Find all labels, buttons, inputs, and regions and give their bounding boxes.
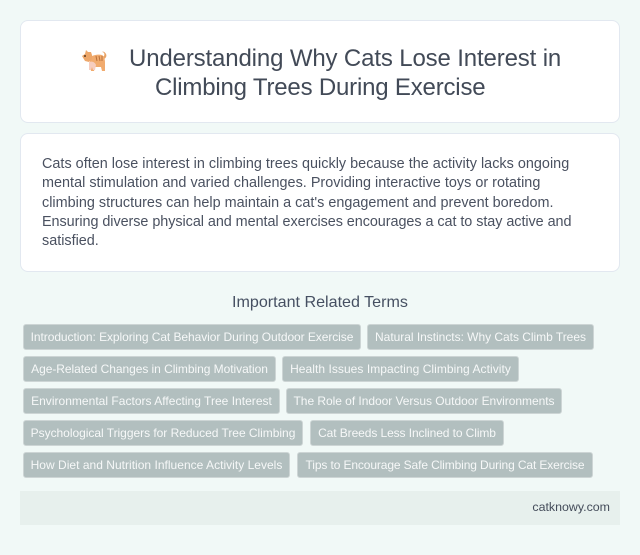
tag: Health Issues Impacting Climbing Activity <box>290 362 511 376</box>
title: Understanding Why Cats Lose Interest in <box>129 45 561 72</box>
tag <box>23 324 361 350</box>
title <box>129 45 561 101</box>
tag: Environmental Factors Affecting Tree Interest <box>31 394 272 408</box>
body paragraph: Ensuring diverse physical and mental exercises encourages a cat to stay active and <box>42 214 571 230</box>
tag <box>367 324 594 350</box>
tag: Natural Instincts: Why Cats Climb Trees <box>375 330 586 344</box>
header panel <box>20 20 620 123</box>
tag: Introduction: Exploring Cat Behavior During Outdoor Exercise <box>31 330 353 344</box>
tag <box>310 420 504 446</box>
body paragraph: Cats often lose interest in climbing trees quickly because the activity lacks ongoing <box>42 156 569 172</box>
tag <box>23 452 290 478</box>
body paragraph <box>42 156 571 249</box>
tag: Psychological Triggers for Reduced Tree Climbing <box>31 426 295 440</box>
intro text panel <box>20 133 620 272</box>
footer site name: catknowy.com <box>532 500 610 514</box>
title: Climbing Trees During Exercise <box>155 74 485 101</box>
tag: Age-Related Changes in Climbing Motivation <box>31 362 268 376</box>
tag <box>23 420 303 446</box>
tag <box>297 452 593 478</box>
tag <box>282 356 519 382</box>
tag <box>286 388 562 414</box>
tag <box>23 388 280 414</box>
related terms tags <box>23 324 594 478</box>
related terms heading: Important Related Terms <box>232 293 408 311</box>
tag: The Role of Indoor Versus Outdoor Environments <box>294 394 554 408</box>
tag: Tips to Encourage Safe Climbing During Cat Exercise <box>306 458 584 472</box>
tag: Cat Breeds Less Inclined to Climb <box>318 426 496 440</box>
body paragraph: mental stimulation and varied challenges. Providing interactive toys or rotating <box>42 175 540 191</box>
icon: cat <box>82 50 106 71</box>
tag: How Diet and Nutrition Influence Activity Levels <box>31 458 282 472</box>
footer bar <box>20 491 620 525</box>
body paragraph: climbing structures can help maintain a cat's engagement and prevent boredom. <box>42 195 553 211</box>
tag <box>23 356 276 382</box>
body paragraph: satisfied. <box>42 233 99 249</box>
